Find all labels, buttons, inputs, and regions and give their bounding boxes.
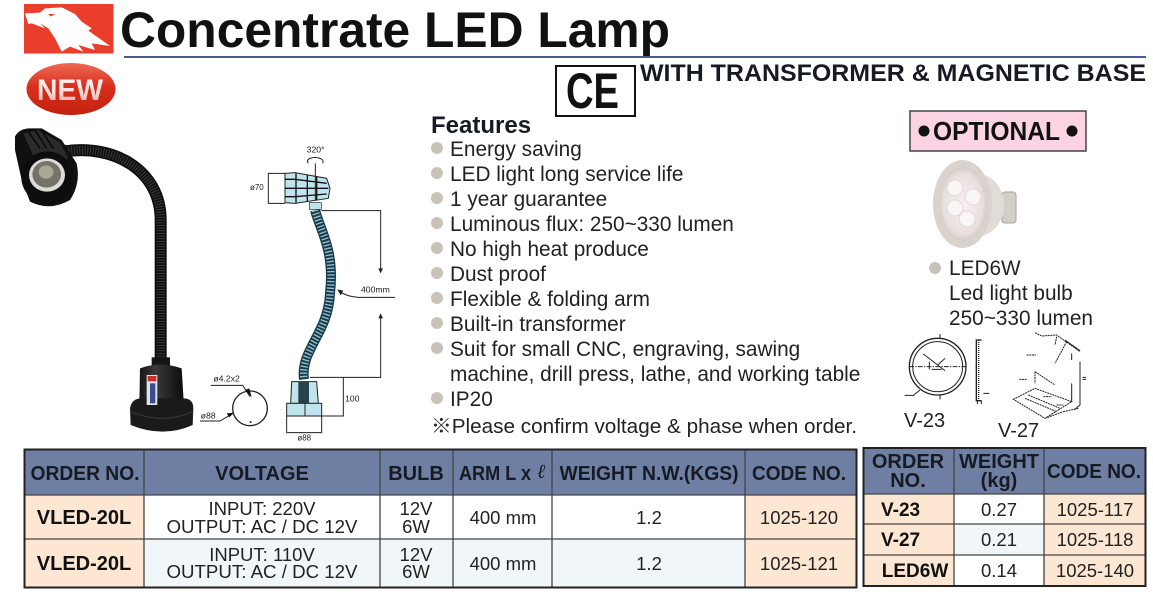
features list: Built-in transformer [450,313,626,336]
main order table [24,449,856,588]
features list: Dust proof [450,263,546,286]
table row: 220V: OUTPUT: AC / DC 12V [166,516,358,537]
logo: red eagle [24,4,114,54]
badge: NEW [26,63,116,115]
table row: 110V: VLED-20L [37,553,131,575]
table header row: ℓ [537,461,546,483]
parts row: LED6W: 0.14 [981,560,1017,581]
table row: 110V: INPUT: 110V [209,544,315,565]
table row: 220V: 400 mm [470,507,536,528]
title: Concentrate LED Lamp [120,2,670,58]
parts row: LED6W [882,560,1134,582]
table row: 110V: 1.2 [636,553,662,574]
dimension drawing: 100 [345,393,360,403]
features list: Luminous flux: 250~330 lumen [450,213,734,236]
parts table header: ORDER [872,451,945,473]
features heading: Features [431,112,531,139]
table header row: ORDER NO. [30,463,140,485]
parts row: V-23: 0.27 [981,499,1017,520]
parts table header: CODE NO. [1047,461,1141,483]
features list: Energy saving [450,138,582,161]
parts table header: (kg) [981,470,1017,492]
V-27 label: V-27 [998,420,1039,442]
features list: 1 year guarantee [450,188,607,211]
features list: LED light long service life [450,163,684,186]
parts row: V-27: 0.21 [981,529,1017,550]
LED bulb image [933,160,1016,248]
mounting hole diagram [200,374,267,426]
parts row: LED6W: 1025-140 [1056,560,1134,581]
table row: 110V: 12V [400,544,433,565]
table header row: VOLTAGE [215,463,309,485]
dimension drawing: ø70 [250,183,264,192]
parts row: V-23: 1025-117 [1057,499,1133,520]
table row: 110V [37,544,838,582]
parts table header: NO. [890,470,926,492]
features list: Suit for small CNC, engraving, sawing [450,338,800,361]
table row: 110V: 400 mm [470,553,536,574]
dimension drawing: 320° [307,145,325,155]
V-23 label: V-23 [904,410,945,432]
mounting hole diagram: ø88 [201,410,216,420]
parts table header [872,451,1141,492]
table row: 110V: 6W [402,561,430,582]
LED6W description: Led light bulb [949,282,1073,305]
dimension drawing: 400mm [361,285,390,295]
CE mark: CE [566,63,619,119]
table header row: BULB [388,463,444,485]
dimension drawing: ø88 [297,434,312,443]
table row: 220V: 1025-120 [760,507,838,528]
features list: IP20 [450,388,493,411]
features list: ※Please confirm voltage & phase when order. [431,415,857,438]
parts row: V-23: V-23 [881,500,920,521]
table header row [30,461,846,485]
table row: 220V: INPUT: 220V [209,498,316,519]
table row: 220V: 6W [402,516,430,537]
features list [431,112,860,438]
parts row: V-27 [881,529,1133,551]
subtitle: WITH TRANSFORMER & MAGNETIC BASE [640,60,1146,87]
optional label: OPTIONAL [933,116,1060,146]
optional parts table [863,448,1146,586]
LED6W description: 250~330 lumen [949,307,1093,330]
badge: NEW: NEW [37,74,104,107]
parts row: V-27: 1025-118 [1057,529,1133,550]
LED6W description: LED6W [949,257,1021,280]
table header row: CODE NO. [752,463,846,485]
parts row: V-27: V-27 [881,530,920,551]
table row: 110V: 1025-121 [760,553,838,574]
table header row: ARM L x [459,463,531,485]
table row: 220V: VLED-20L [37,507,131,529]
table header row: WEIGHT N.W.(KGS) [560,463,738,485]
V-27 drawing [1013,333,1086,418]
mounting hole diagram: ø4.2x2 [213,374,240,384]
lamp photo [15,128,193,432]
features list: Flexible & folding arm [450,288,650,311]
V-23 drawing [905,334,989,404]
optional label [910,111,1086,151]
LED6W description [929,257,1093,330]
features list: No high heat produce [450,238,649,261]
dimension drawing [250,145,395,443]
table row: 220V [37,498,838,537]
table row: 220V: 1.2 [636,507,662,528]
parts row: LED6W: LED6W [882,561,948,582]
table row: 220V: 12V [400,498,433,519]
table row: 110V: OUTPUT: AC / DC 12V [166,561,358,582]
parts row: V-23 [881,499,1133,521]
parts table header: WEIGHT [959,451,1039,473]
features list: machine, drill press, lathe, and working table [450,363,860,386]
